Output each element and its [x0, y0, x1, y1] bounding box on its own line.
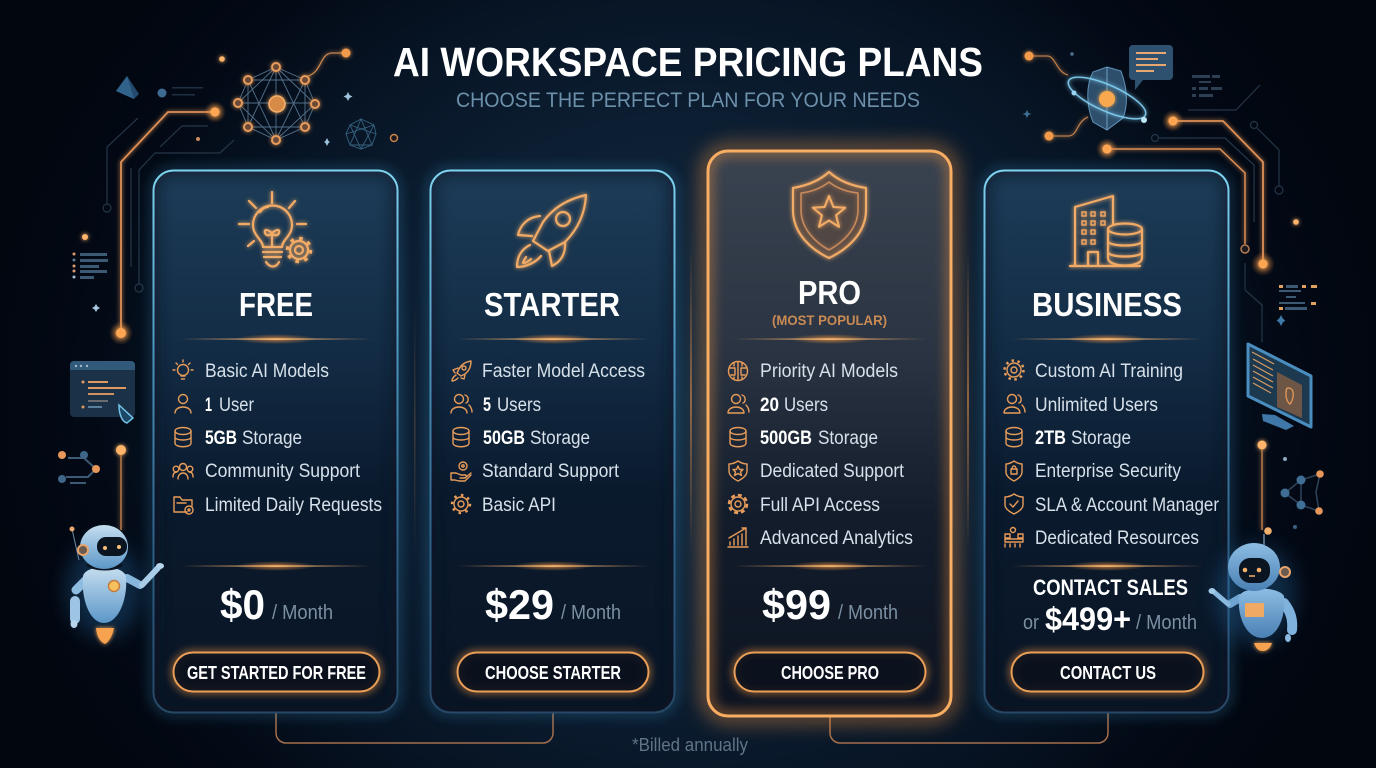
most popular tag: (MOST POPULAR)	[772, 312, 887, 328]
icon: building and database	[1070, 196, 1142, 266]
feature: storage: Storage	[818, 428, 878, 449]
button	[734, 652, 926, 692]
plan name: STARTER	[484, 286, 620, 323]
plan name: PRO	[798, 274, 861, 311]
feature: daily requests: Limited Daily Requests	[205, 495, 382, 516]
divider	[1011, 561, 1203, 571]
panel: pro plan	[708, 151, 951, 716]
icon: shield with star	[793, 172, 866, 258]
title: AI WORKSPACE PRICING PLANS	[393, 39, 983, 85]
feature list	[728, 361, 913, 549]
left robot	[66, 525, 164, 644]
feature: storage	[1006, 428, 1131, 449]
price: $99	[762, 581, 831, 628]
feature: support: Community Support	[205, 461, 361, 482]
feature: support: Standard Support	[482, 461, 620, 482]
button: CONTACT US	[1060, 663, 1156, 683]
feature: basic api	[452, 495, 556, 516]
price: contact sales: / Month	[1136, 612, 1197, 634]
feature: storage	[175, 428, 302, 449]
decoration: left circuit traces	[72, 101, 234, 345]
feature: users: 1	[205, 395, 212, 416]
divider	[457, 334, 649, 344]
icon: rocket	[517, 195, 586, 267]
button	[1012, 652, 1204, 692]
plan name: BUSINESS	[1032, 286, 1182, 323]
feature: dedicated support: Dedicated Support	[760, 461, 905, 482]
divider	[180, 334, 372, 344]
decoration: right circuit traces	[1096, 85, 1317, 342]
icon: light bulb and gear	[239, 192, 310, 266]
feature: full api: Full API Access	[760, 495, 880, 516]
divider	[180, 561, 372, 571]
feature: storage: Storage	[242, 428, 302, 449]
panel: free plan	[153, 170, 398, 713]
button: CHOOSE PRO	[781, 663, 879, 683]
price: contact sales: or	[1023, 612, 1039, 634]
price: / Month	[561, 602, 621, 624]
divider	[1011, 334, 1203, 344]
feature list	[1004, 360, 1220, 549]
feature: storage: 50GB	[483, 428, 525, 449]
feature list	[173, 360, 382, 516]
feature: basic api: Basic API	[482, 495, 556, 516]
plan name: FREE	[239, 286, 313, 323]
feature: users	[451, 394, 541, 416]
feature: users: Unlimited Users	[1035, 395, 1158, 416]
button	[174, 652, 380, 692]
divider	[734, 561, 926, 571]
button: GET STARTED FOR FREE	[187, 663, 366, 683]
feature: analytics: Advanced Analytics	[760, 528, 913, 549]
decoration: top-right code lines	[1192, 75, 1222, 97]
feature: storage	[730, 428, 878, 449]
feature: sla: SLA & Account Manager	[1035, 495, 1220, 516]
feature: storage: 5GB	[205, 428, 237, 449]
price: contact sales: $499+	[1045, 601, 1131, 637]
decoration: top-left neural network	[219, 48, 350, 144]
feature: basic ai models: Basic AI Models	[205, 361, 329, 382]
price	[485, 581, 621, 628]
decoration: left node graph	[58, 451, 100, 483]
price: $0	[220, 581, 265, 628]
right robot	[1208, 527, 1296, 651]
feature: users	[175, 394, 255, 416]
divider	[734, 334, 926, 344]
decoration: top-left small shapes	[116, 76, 398, 149]
feature: storage: Storage	[1071, 428, 1131, 449]
price: contact sales: CONTACT SALES	[1033, 575, 1188, 600]
feature: storage: Storage	[530, 428, 590, 449]
price: $29	[485, 581, 554, 628]
button	[458, 652, 648, 692]
feature: users: Users	[784, 395, 828, 416]
connector: free to starter	[276, 713, 553, 743]
feature: priority models: Priority AI Models	[760, 361, 898, 382]
decoration: right vertical trace	[1258, 440, 1266, 530]
button: CHOOSE STARTER	[485, 663, 621, 683]
decoration: right monitor	[1248, 344, 1311, 430]
feature list	[451, 361, 645, 516]
feature: storage: 2TB	[1035, 428, 1066, 449]
feature: custom training: Custom AI Training	[1035, 361, 1183, 382]
feature: faster access: Faster Model Access	[482, 361, 645, 382]
footnote: *Billed annually	[632, 735, 748, 755]
feature: users: Users	[497, 395, 541, 416]
subtitle: CHOOSE THE PERFECT PLAN FOR YOUR NEEDS	[456, 89, 920, 112]
price	[220, 581, 333, 628]
panel: starter plan	[430, 170, 675, 713]
panel: business plan	[984, 170, 1229, 713]
side glow between cards	[414, 250, 969, 560]
price	[762, 581, 898, 628]
decoration: top-right orb	[1022, 45, 1173, 140]
connector: pro to business	[830, 713, 1108, 743]
feature: users: 20	[760, 395, 779, 416]
feature: storage: 500GB	[760, 428, 812, 449]
feature: users: User	[219, 395, 255, 416]
feature: users: 5	[483, 395, 491, 416]
decoration: left vertical trace	[116, 445, 126, 530]
price: contact sales	[1023, 575, 1197, 637]
feature: resources: Dedicated Resources	[1035, 528, 1199, 549]
decoration: left code window	[70, 361, 135, 423]
decoration: right node graph	[1280, 457, 1324, 529]
divider	[457, 561, 649, 571]
feature: storage	[453, 428, 590, 449]
feature: users	[728, 394, 828, 416]
price: / Month	[272, 602, 333, 624]
price: / Month	[838, 602, 898, 624]
feature: security: Enterprise Security	[1035, 461, 1181, 482]
